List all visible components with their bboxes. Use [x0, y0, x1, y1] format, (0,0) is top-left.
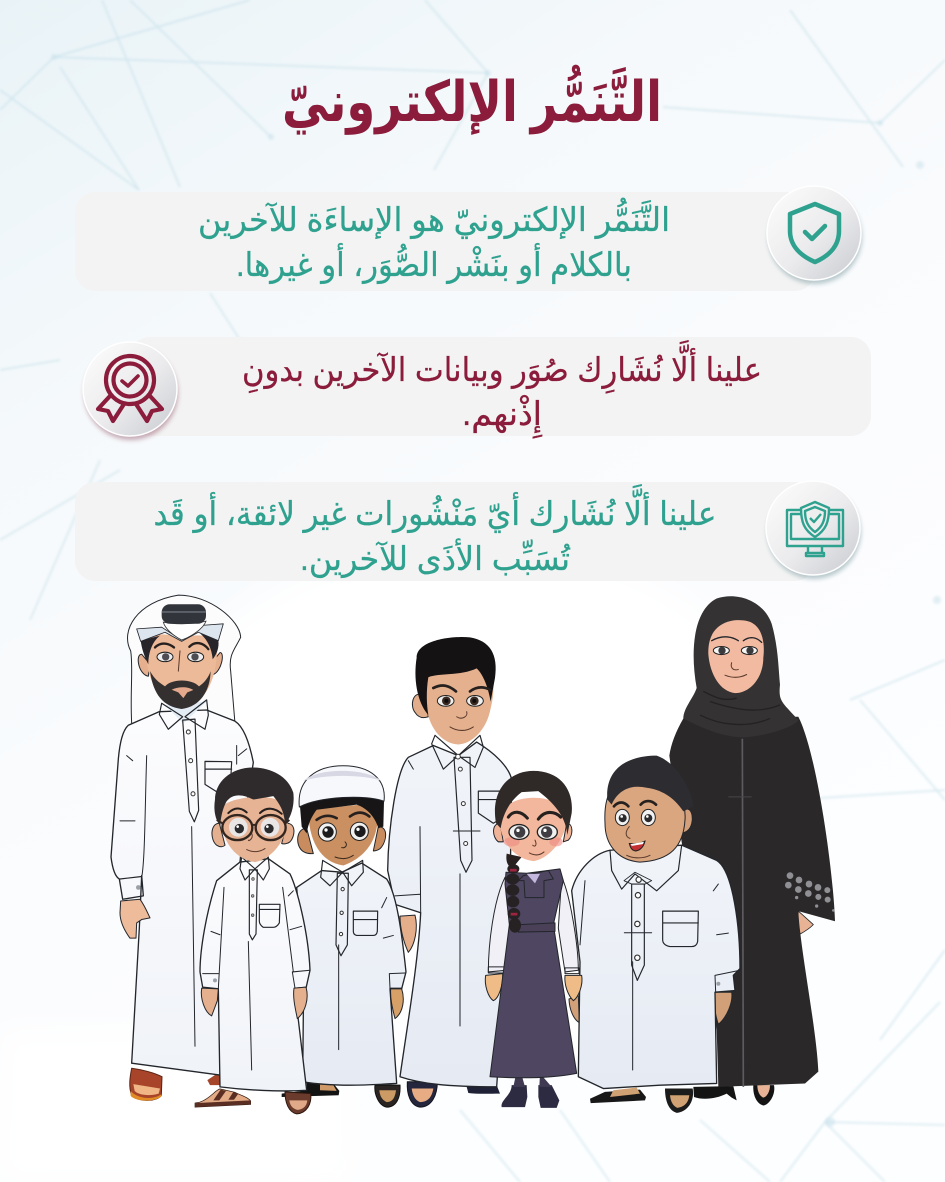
icon: monitor with shield	[766, 481, 861, 579]
panel: sharing images	[130, 337, 871, 439]
figure: boy with glasses	[195, 767, 311, 1114]
inappropriate posts text: تُسَبِّب الأذَى للآخرين.	[300, 538, 570, 578]
icon: award medal	[83, 342, 178, 440]
sharing images text	[242, 340, 762, 439]
sharing images text: إِذْنهم.	[462, 395, 542, 439]
panel: inappropriate posts	[75, 482, 815, 581]
panel: definition	[75, 192, 815, 291]
inappropriate posts text: علينا ألَّا نُشَارك أيّ مَنْشُورات غير لائقة، أو قَد	[154, 484, 716, 533]
figure: mother in abaya	[669, 596, 835, 1105]
definition text: بالكلام أو بنَشْر الصُّوَر، أو غيرها.	[236, 243, 632, 284]
definition text	[198, 198, 670, 284]
title: التَّنَمُّر الإلكترونيّ	[282, 65, 662, 135]
icon: shield with check	[767, 186, 862, 284]
definition text: التَّنَمُّر الإلكترونيّ هو الإساءَة للآخرين	[198, 198, 670, 239]
sharing images text: علينا ألَّا نُشَارِك صُوَر وبيانات الآخرين بدونِ	[242, 340, 762, 394]
figure: chubby boy	[569, 756, 740, 1113]
figure: father in thobe and ghutra	[111, 595, 253, 1101]
inappropriate posts text	[154, 484, 716, 578]
figure: older brother	[388, 637, 512, 1107]
illustration: family group	[111, 595, 835, 1114]
figure: girl in pinafore	[485, 771, 582, 1108]
figure: boy with cap	[282, 766, 406, 1107]
